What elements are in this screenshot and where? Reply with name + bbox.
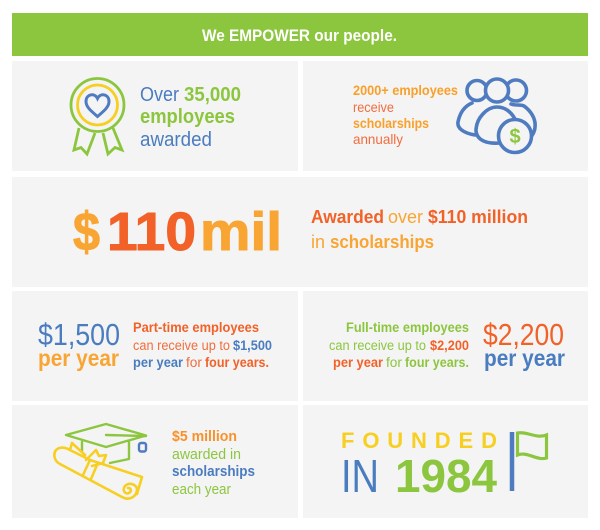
text: full-time description: $2,200 bbox=[430, 338, 469, 353]
icon: group of people with dollar coin bbox=[458, 79, 535, 152]
text: in 1984 bbox=[341, 450, 497, 502]
figure: $2,200 per year: $2,200 bbox=[483, 317, 564, 352]
panel: $110 million bbox=[12, 177, 588, 287]
panel: part-time employees bbox=[12, 291, 298, 401]
figure: $2,200 per year: per year bbox=[484, 345, 565, 371]
text: full-time description: for bbox=[386, 355, 403, 370]
text: awarded over $110 million in scholarships: Awarded bbox=[311, 207, 384, 227]
text: full-time description: Full-time employees bbox=[346, 320, 469, 335]
text: in 1984: 1984 bbox=[395, 450, 497, 502]
text: awarded over $110 million in scholarships: over bbox=[388, 207, 423, 227]
text: awarded over $110 million in scholarships bbox=[311, 207, 528, 252]
panel: employees awarded bbox=[12, 61, 298, 171]
text: awarded over $110 million in scholarships: in bbox=[311, 232, 325, 252]
big figure: $110mil: mil bbox=[200, 202, 282, 262]
text: over 35,000 employees awarded: Over bbox=[140, 84, 179, 106]
text: 2000+ employees receive scholarships annually: 2000+ employees bbox=[353, 82, 458, 98]
text: full-time description bbox=[329, 320, 469, 370]
figure: $1,500 per year: per year bbox=[38, 345, 119, 371]
text: part-time description: can receive up to bbox=[133, 338, 230, 353]
figure: $2,200 per year bbox=[483, 317, 565, 371]
figure: $1,500 per year bbox=[38, 317, 120, 371]
text: part-time description: per year bbox=[133, 355, 184, 370]
text: full-time description: per year bbox=[333, 355, 384, 370]
text: part-time description bbox=[133, 320, 272, 370]
panel: scholarship recipients bbox=[303, 61, 588, 171]
text: $5 million awarded in scholarships each year: awarded in bbox=[172, 447, 241, 463]
header banner bbox=[12, 13, 588, 56]
panel: founded in 1984 bbox=[303, 405, 588, 518]
text: over 35,000 employees awarded: employees bbox=[140, 106, 235, 128]
text: 2000+ employees receive scholarships annually: scholarships bbox=[353, 115, 429, 131]
big figure: $110mil bbox=[73, 202, 282, 262]
text: $5 million awarded in scholarships each year: each year bbox=[172, 482, 231, 498]
text: in 1984: IN bbox=[341, 450, 379, 502]
icon: award ribbon bbox=[71, 78, 124, 154]
text: part-time description: four years. bbox=[205, 355, 269, 370]
figure: $1,500 per year: $1,500 bbox=[38, 317, 120, 352]
text: 2000+ employees receive scholarships annually: receive bbox=[353, 99, 394, 115]
text: over 35,000 employees awarded: awarded bbox=[140, 129, 212, 151]
text: part-time description: $1,500 bbox=[233, 338, 272, 353]
text: part-time description: for bbox=[186, 355, 203, 370]
text: awarded over $110 million in scholarships: scholarships bbox=[330, 232, 434, 252]
text: $5 million awarded in scholarships each year: $5 million bbox=[172, 429, 237, 445]
text: $5 million awarded in scholarships each year bbox=[172, 429, 255, 498]
panel: $5 million a year bbox=[12, 405, 298, 518]
icon: group of people with dollar coin: $ bbox=[509, 126, 521, 148]
big figure: $110mil: $ bbox=[73, 202, 100, 262]
text: full-time description: can receive up to bbox=[329, 338, 426, 353]
text: founded: FOUNDED bbox=[341, 428, 497, 453]
text: 2000+ employees receive scholarships annually: annually bbox=[353, 131, 403, 147]
text: 2000+ employees receive scholarships annually bbox=[353, 82, 458, 147]
text: over 35,000 employees awarded bbox=[140, 84, 241, 151]
text: over 35,000 employees awarded: 35,000 bbox=[184, 84, 241, 106]
text: awarded over $110 million in scholarships: $110 million bbox=[428, 207, 528, 227]
panel: full-time employees bbox=[303, 291, 588, 401]
icon: graduation cap and diploma bbox=[54, 424, 146, 499]
text: full-time description: four years. bbox=[405, 355, 469, 370]
text: part-time description: Part-time employees bbox=[133, 320, 259, 335]
text: $5 million awarded in scholarships each year: scholarships bbox=[172, 464, 255, 480]
title: We EMPOWER our people. bbox=[202, 26, 397, 45]
icon: flag bbox=[512, 432, 546, 491]
big figure: $110mil: 110 bbox=[107, 202, 196, 262]
